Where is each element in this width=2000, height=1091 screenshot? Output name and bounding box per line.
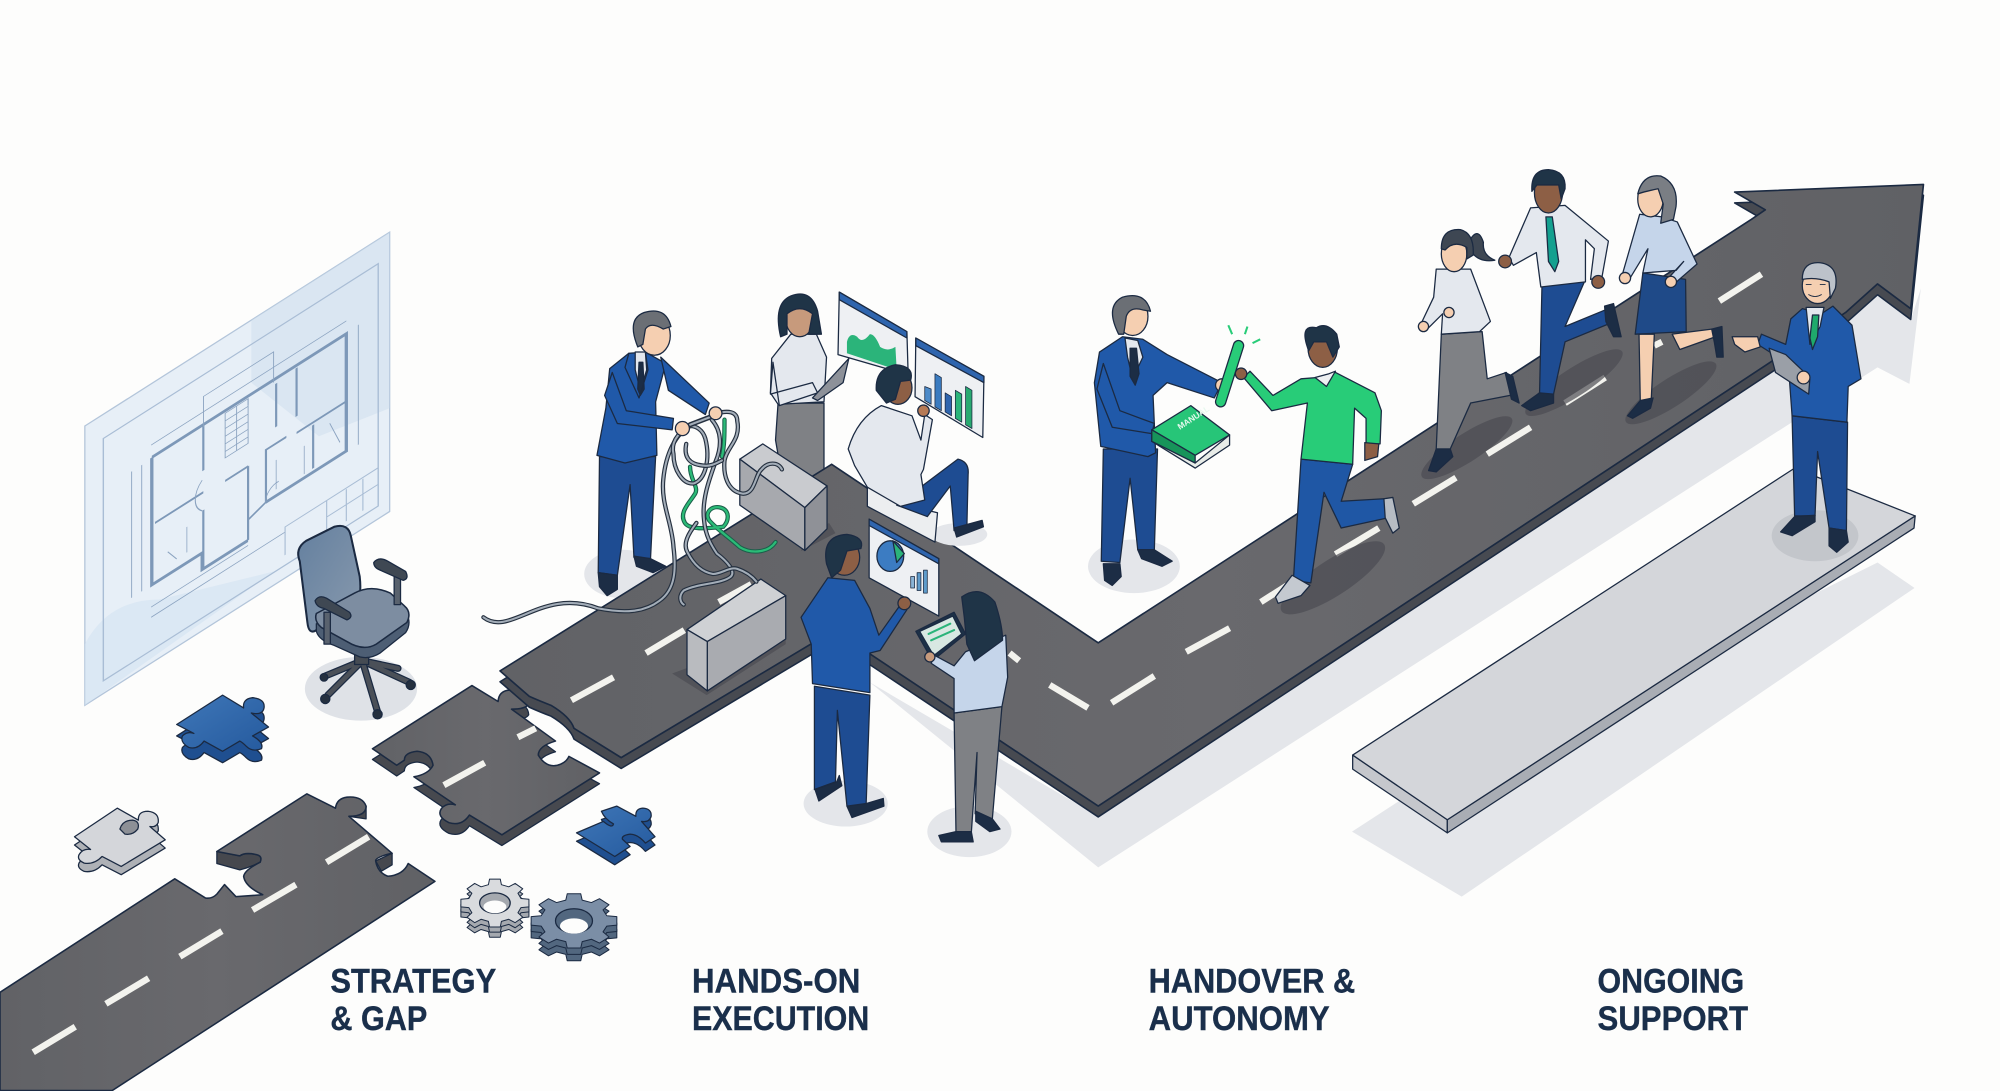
stage label: handover xyxy=(1149,963,1355,1038)
monitor: area chart xyxy=(838,292,908,375)
box: lower rack xyxy=(672,579,786,695)
tablet with chart xyxy=(916,612,966,661)
person: green runner xyxy=(1235,326,1399,626)
platform: ongoing support xyxy=(1353,468,1915,833)
gear: large slate xyxy=(531,894,617,961)
lane dashes: jigsaw xyxy=(444,728,536,785)
office chair xyxy=(298,526,417,721)
stage label: support: SUPPORT xyxy=(1598,1000,1748,1038)
puzzle piece: blue left xyxy=(177,695,269,763)
book: manual xyxy=(1152,404,1230,468)
person: man pointing at pie chart xyxy=(801,534,911,827)
tangled cables xyxy=(483,407,782,622)
stage label: handover: HANDOVER & xyxy=(1149,963,1355,1001)
box: upper rack xyxy=(740,444,835,551)
stage label: strategy: STRATEGY xyxy=(330,963,497,1001)
stage label: strategy: & GAP xyxy=(330,1000,427,1038)
book: manual: MANUAL xyxy=(1175,404,1211,432)
stage label: execution: HANDS-ON xyxy=(692,963,860,1001)
platform shadow xyxy=(1352,562,1915,897)
lane dashes: start xyxy=(33,837,369,1052)
person: runner with grey bob xyxy=(1618,176,1723,434)
jigsaw road piece xyxy=(372,686,599,846)
stage label: execution: EXECUTION xyxy=(692,1000,869,1038)
person: runner with ponytail xyxy=(1414,230,1519,489)
stage label: support xyxy=(1598,963,1748,1038)
road: main chevron and arrow xyxy=(500,184,1923,817)
person: senior advisor with clipboard xyxy=(1732,263,1861,561)
person: woman with tablet behind road xyxy=(770,294,849,482)
stage label: support: ONGOING xyxy=(1598,963,1744,1001)
gear: small light xyxy=(461,879,529,937)
puzzle piece: grey xyxy=(75,808,165,875)
road shadow xyxy=(870,288,1921,867)
relay baton xyxy=(1221,325,1260,402)
monitor: bar chart xyxy=(915,338,984,437)
blueprint panel xyxy=(85,232,390,705)
puzzle piece: blue right xyxy=(577,806,655,865)
person: woman with tablet on road xyxy=(925,592,1011,857)
floor plan xyxy=(103,264,378,681)
stage label: strategy xyxy=(330,963,497,1038)
lane dashes: main xyxy=(571,274,1761,708)
person: man untangling cables xyxy=(584,311,709,598)
stage label: handover: AUTONOMY xyxy=(1149,1000,1330,1038)
monitor: pie chart xyxy=(869,519,939,616)
person: manager handing over xyxy=(1088,296,1228,593)
stage label: execution xyxy=(692,963,869,1038)
person: seated analyst xyxy=(848,365,987,546)
person: runner with teal tie xyxy=(1499,170,1630,426)
road segment: start xyxy=(0,794,435,1091)
